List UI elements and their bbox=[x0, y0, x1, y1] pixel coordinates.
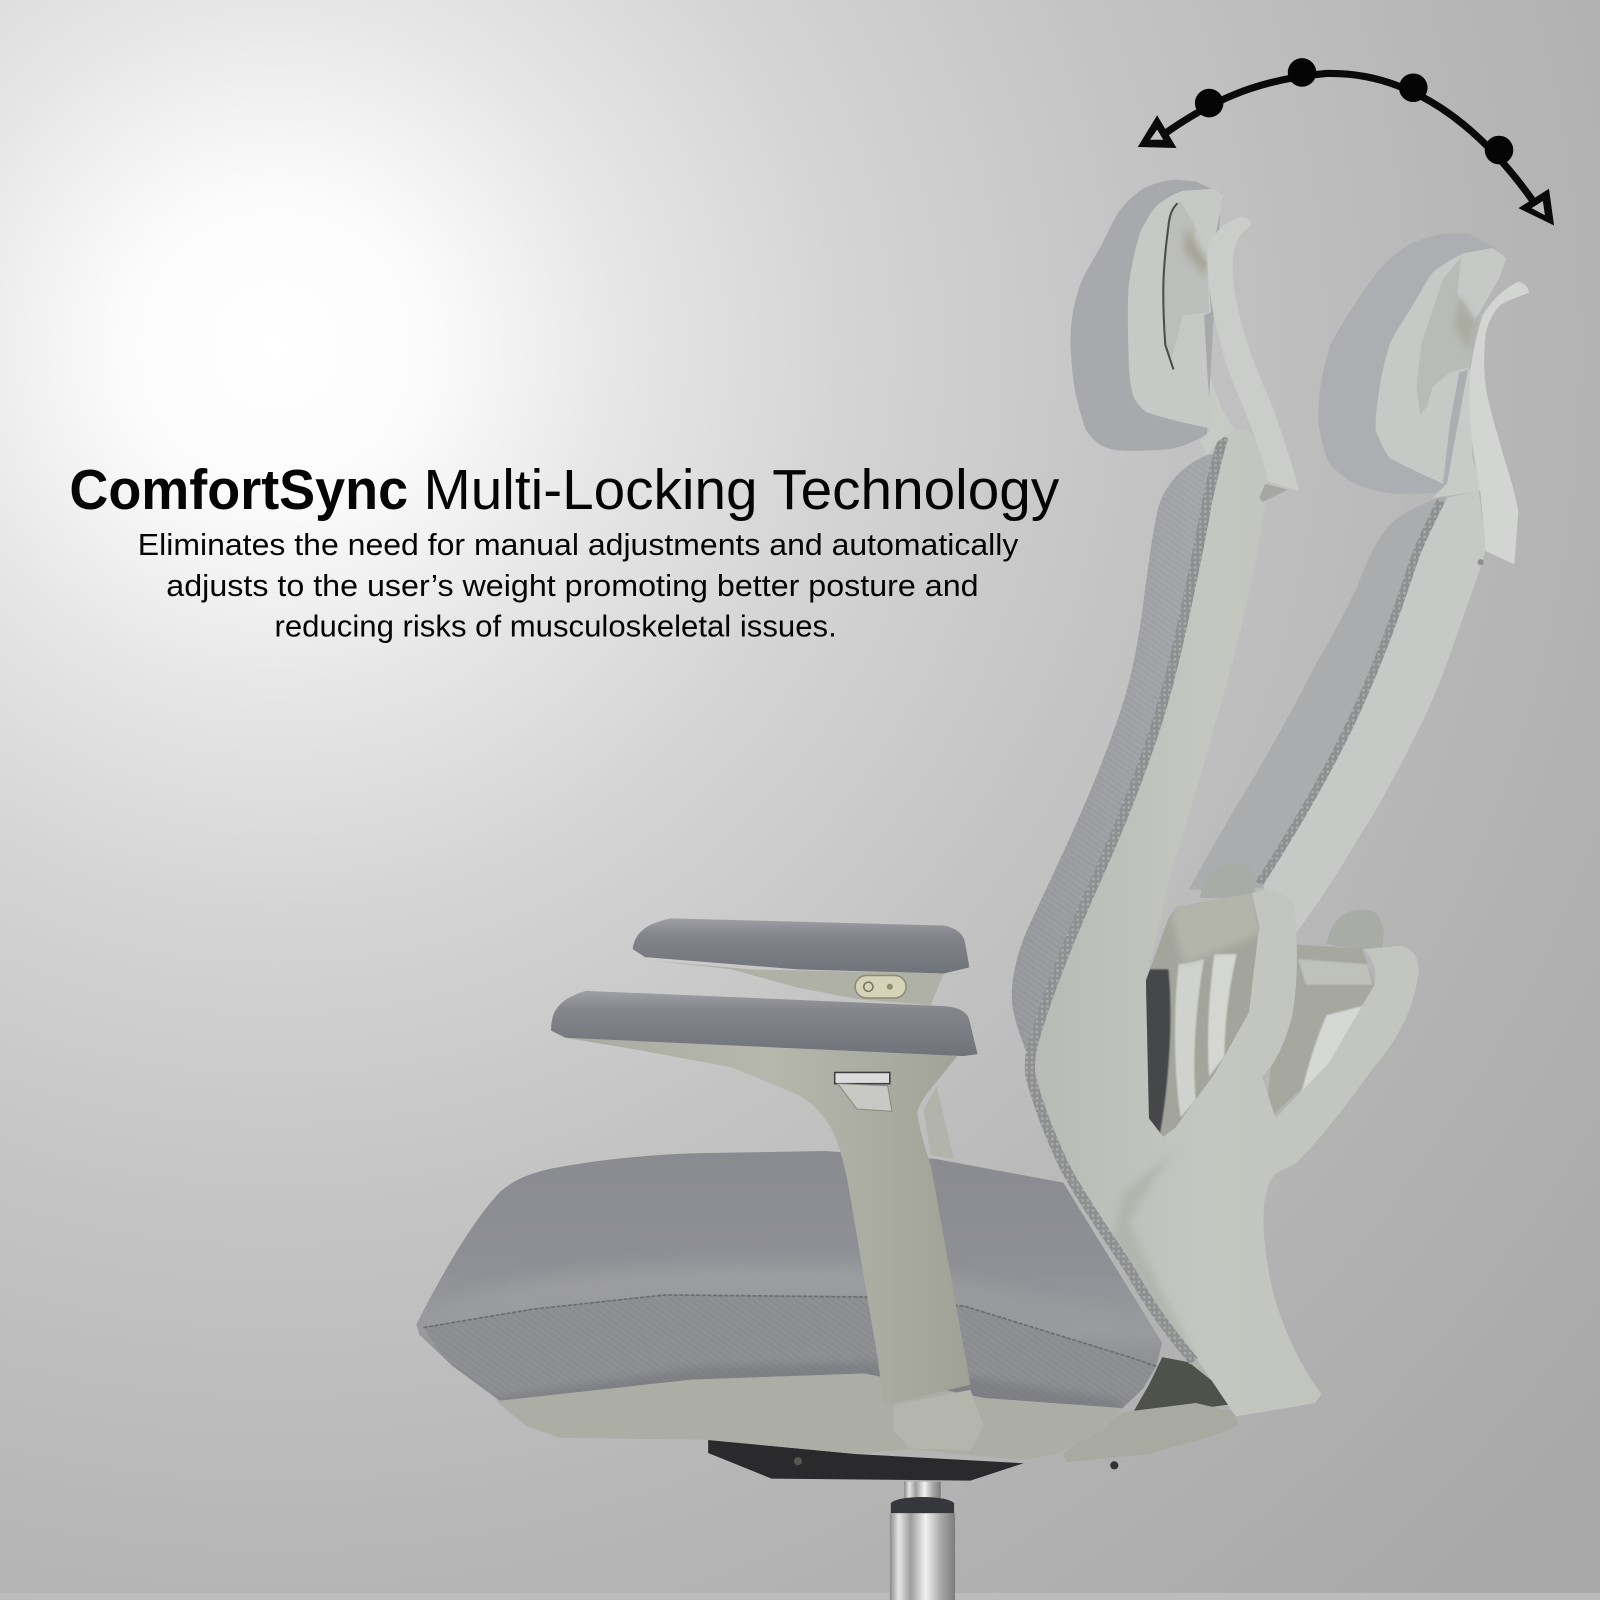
support post bbox=[1200, 315, 1235, 455]
heading: ComfortSync Multi-Locking Technology bbox=[69, 458, 1059, 521]
body text block: reducing risks of musculoskeletal issues. bbox=[274, 610, 837, 644]
rear backrest frame bbox=[1261, 491, 1486, 934]
plastic pad bbox=[1128, 189, 1223, 429]
rear headrest arm bbox=[1470, 282, 1529, 564]
cushion bbox=[1070, 180, 1221, 451]
body text block: adjusts to the user’s weight promoting better posture and bbox=[166, 569, 979, 603]
chair: seat cushion bbox=[416, 1151, 1162, 1429]
dark rear mechanism bbox=[1130, 1357, 1240, 1418]
bracket bbox=[1259, 484, 1288, 502]
rear headrest cushion bbox=[1318, 234, 1497, 494]
rear backrest fabric bbox=[1189, 496, 1449, 890]
chrome lever bbox=[835, 1072, 890, 1084]
arm post bbox=[923, 1087, 954, 1159]
chrome gas cylinder bbox=[904, 1482, 941, 1498]
rear bracket pin bbox=[1478, 559, 1484, 565]
rear lumbar interior bbox=[1265, 944, 1374, 1122]
heading: ComfortSync Multi-Locking Technology: Multi-Locking Technology bbox=[423, 458, 1059, 521]
arm pad bbox=[551, 991, 978, 1056]
arm lower knuckle bbox=[894, 1390, 984, 1451]
black mounting plate bbox=[708, 1440, 1023, 1481]
lumbar opening interior bbox=[1146, 893, 1259, 1136]
body text block bbox=[138, 528, 1019, 644]
rear headrest pad bbox=[1376, 248, 1506, 484]
mesh trim edge bbox=[1030, 437, 1223, 1361]
inner raised part bbox=[1163, 201, 1209, 358]
rear headrest post bbox=[1433, 369, 1483, 498]
arm body bbox=[565, 1038, 970, 1405]
seat seam bbox=[423, 1295, 1156, 1366]
seat front roll highlight bbox=[533, 1266, 866, 1296]
arm support bbox=[649, 960, 944, 1005]
chair: rear armrest bbox=[633, 918, 969, 1159]
chair: upright headrest bbox=[1070, 180, 1299, 502]
rear lower frame bbox=[1250, 946, 1419, 1173]
backrest frame and lower body bbox=[1031, 429, 1321, 1416]
rear headrest inner bbox=[1416, 257, 1476, 415]
backrest mesh fabric bbox=[1012, 449, 1240, 1066]
rear under-seat pan bbox=[1063, 1403, 1239, 1462]
adjustment button bbox=[855, 976, 906, 998]
chair: reclined rear position bbox=[1189, 234, 1529, 1173]
slot shadow bbox=[1163, 203, 1178, 369]
body text block: Eliminates the need for manual adjustments and automatically bbox=[138, 528, 1019, 562]
rear backrest trim bbox=[1259, 501, 1441, 884]
arm pad bbox=[633, 918, 969, 973]
crease shading bbox=[1112, 1150, 1196, 1357]
rear lumbar bumps bbox=[1200, 864, 1256, 898]
curved arm bbox=[1207, 217, 1299, 491]
chair: front armrest bbox=[551, 991, 984, 1451]
seat side panel shading bbox=[424, 1295, 1155, 1408]
chair: seat pan bbox=[496, 1373, 1122, 1460]
chair: under-seat mechanism bbox=[708, 1357, 1240, 1600]
arrow: headrest tilt range bbox=[1138, 58, 1554, 226]
chair: upright backrest and frame bbox=[1012, 429, 1321, 1416]
heading: ComfortSync Multi-Locking Technology: ComfortSync bbox=[69, 458, 408, 521]
